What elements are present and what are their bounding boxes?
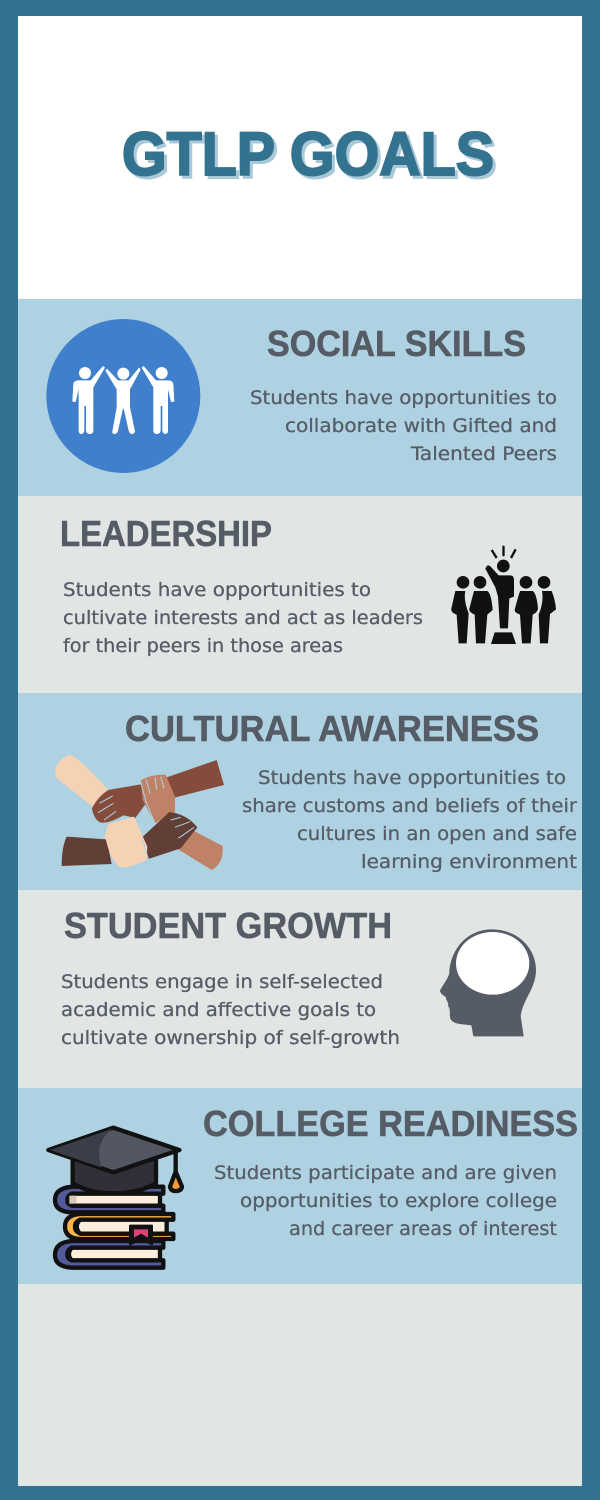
text: student growth: cultivate ownership of self-growth bbox=[61, 1027, 400, 1049]
icon: graduation cap on books bbox=[48, 1128, 182, 1268]
panel: title bbox=[18, 16, 582, 299]
text: student growth: academic and affective goals to bbox=[61, 999, 376, 1021]
panel: student growth bbox=[18, 890, 582, 1088]
text: college readiness: opportunities to explore college bbox=[240, 1190, 557, 1212]
text: social skills bbox=[250, 387, 557, 465]
icon: head silhouette bbox=[440, 929, 536, 1036]
text: leadership bbox=[63, 579, 423, 657]
title: GTLP GOALS bbox=[122, 120, 494, 188]
text: student growth bbox=[61, 971, 400, 1049]
panel: cultural awareness bbox=[18, 693, 582, 890]
text: cultural awareness: Students have opportunities to bbox=[258, 767, 566, 789]
text: cultural awareness bbox=[242, 767, 577, 873]
heading: college readiness: COLLEGE READINESS bbox=[203, 1103, 578, 1144]
panel: empty footer bbox=[18, 1284, 582, 1486]
panel: social skills bbox=[18, 299, 582, 496]
text: leadership: Students have opportunities to bbox=[63, 579, 371, 601]
title: GTLP GOALS bbox=[125, 123, 497, 191]
text: social skills: collaborate with Gifted and bbox=[285, 415, 557, 437]
text: social skills: Talented Peers bbox=[410, 443, 557, 465]
text: college readiness: and career areas of interest bbox=[289, 1218, 557, 1240]
icon: interlocked hands bbox=[55, 754, 224, 870]
text: cultural awareness: learning environment bbox=[361, 851, 577, 873]
panel: leadership bbox=[18, 496, 582, 693]
heading: social skills: SOCIAL SKILLS bbox=[267, 323, 526, 364]
heading: cultural awareness: CULTURAL AWARENESS bbox=[125, 708, 539, 749]
panel: college readiness bbox=[18, 1088, 582, 1284]
heading: leadership: LEADERSHIP bbox=[60, 513, 272, 554]
heading: student growth: STUDENT GROWTH bbox=[64, 905, 392, 946]
text: college readiness: Students participate and are given bbox=[214, 1162, 557, 1184]
text: cultural awareness: cultures in an open and safe bbox=[297, 823, 577, 845]
text: social skills: Students have opportunities to bbox=[250, 387, 557, 409]
text: student growth: Students engage in self-selected bbox=[61, 971, 383, 993]
text: college readiness bbox=[214, 1162, 557, 1240]
icon: leader in crowd bbox=[451, 546, 556, 644]
text: leadership: for their peers in those areas bbox=[63, 635, 343, 657]
icon: people with raised hands bbox=[46, 319, 200, 473]
text: cultural awareness: share customs and beliefs of their bbox=[242, 795, 577, 817]
text: leadership: cultivate interests and act as leaders bbox=[63, 607, 423, 629]
